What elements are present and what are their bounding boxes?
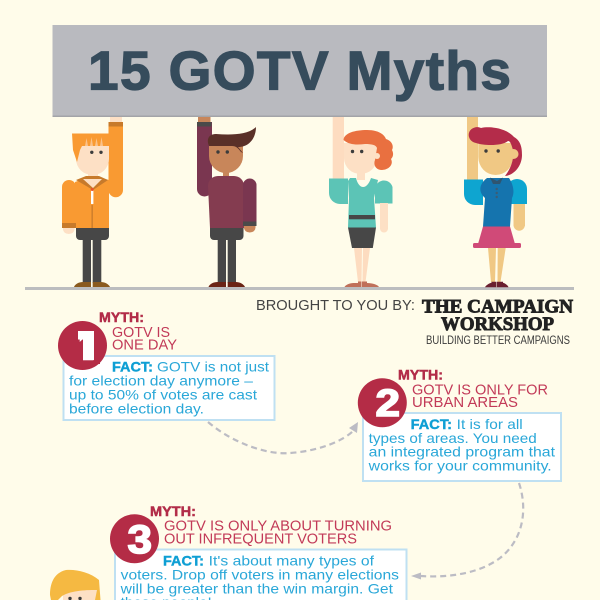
number badge 2	[358, 378, 407, 427]
title banner: 15 GOTV Myths	[88, 40, 511, 102]
number badge 1: 1	[78, 325, 94, 369]
myth 2 heading: URBAN AREAS	[412, 395, 518, 411]
fact box 3: will be greater than the win margin. Get	[120, 580, 393, 596]
character: man in maroon sweater	[197, 117, 256, 287]
fact box 1: before election day.	[69, 400, 204, 416]
myth 3 heading: GOTV IS ONLY ABOUT TURNING	[164, 519, 392, 535]
sponsor credit: THE CAMPAIGN	[422, 296, 573, 318]
myth 2 heading: GOTV IS ONLY FOR	[412, 382, 548, 398]
fact box 1	[64, 356, 274, 420]
myth 1 heading: GOTV IS	[112, 325, 170, 341]
arrow: myth 2 to myth 3	[411, 483, 523, 580]
number badge 1	[58, 321, 107, 370]
title banner	[52, 25, 547, 117]
character: woman in blue blouse	[464, 117, 527, 287]
fact box 3: FACT:	[163, 553, 204, 569]
fact box 1: GOTV is not just	[157, 359, 269, 375]
myth 1 heading	[99, 310, 177, 354]
myth 3 heading: OUT INFREQUENT VOTERS	[164, 531, 357, 547]
myth 3 heading	[150, 504, 392, 547]
character: blond figure at bottom left	[50, 570, 100, 600]
sponsor credit	[256, 296, 573, 347]
fact box 3: It's about many types of	[209, 553, 374, 569]
sponsor credit: BROUGHT TO YOU BY:	[256, 297, 415, 314]
arrow: myth 1 to myth 2	[208, 422, 358, 453]
ground line	[25, 287, 574, 290]
fact box 2: works for your community.	[368, 458, 552, 474]
fact box 2: types of areas. You need	[369, 430, 537, 446]
fact box 2: It is for all	[457, 416, 523, 432]
myth 2 heading	[398, 368, 548, 411]
myth 3 heading: MYTH:	[150, 504, 196, 519]
sponsor credit: WORKSHOP	[441, 314, 554, 335]
fact box 2: an integrated program that	[369, 444, 555, 460]
fact box 1: FACT:	[112, 359, 153, 375]
myth 2	[358, 368, 561, 481]
fact box 1: up to 50% of votes are cast	[69, 386, 257, 402]
number badge 3	[110, 514, 159, 563]
myth 1 heading: ONE DAY	[112, 338, 177, 354]
character: woman in teal top	[329, 117, 393, 287]
fact box 2	[363, 413, 561, 481]
fact box 1: for election day anymore –	[69, 373, 253, 389]
fact box 2: FACT:	[411, 416, 452, 432]
fact box 3	[115, 550, 406, 600]
sponsor credit: BUILDING BETTER CAMPAIGNS	[426, 335, 570, 347]
number badge 3: 3	[128, 518, 152, 562]
myth 1	[58, 310, 274, 420]
myth 1 heading: MYTH:	[99, 310, 144, 325]
number badge 2: 2	[376, 383, 400, 425]
myth 3	[110, 504, 406, 600]
character: man in orange jacket	[62, 117, 123, 287]
myth 2 heading: MYTH:	[398, 368, 443, 383]
fact box 3: voters. Drop off voters in many elections	[121, 566, 399, 582]
